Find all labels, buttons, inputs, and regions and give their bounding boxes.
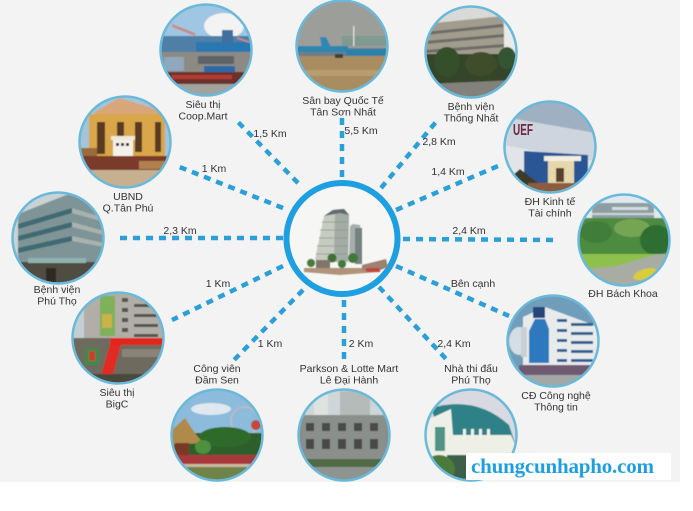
central hub: apartment towers	[286, 183, 398, 294]
distance: 2,3 Km: 2,3 Km	[163, 225, 197, 237]
label: ĐH Kinh tế Tài chính: Tài chính	[528, 208, 572, 220]
photo: Phú Thọ	[12, 192, 104, 284]
label: ĐH Bách Khoa: ĐH Bách Khoa	[588, 288, 658, 300]
station: Parkson & Lotte Mart	[298, 363, 398, 481]
photo: Nhà thi đấu	[423, 389, 517, 483]
connector: Bách Khoa	[403, 239, 557, 240]
photo: Đầm Sen	[171, 389, 263, 481]
label: Siêu thị BigC: BigC	[106, 398, 129, 410]
label: UBND Q.Tân Phú: UBND	[113, 191, 143, 203]
label: Parkson & Lotte Mart Lê Đại Hành: Parkson & Lotte Mart	[300, 363, 398, 375]
connector: Thống Nhất	[381, 122, 436, 188]
station: ĐH Bách Khoa	[578, 194, 672, 300]
distance: 2,8 Km: 2,8 Km	[422, 136, 456, 148]
connector: UBND	[177, 166, 283, 208]
watermark: chungcunhapho.com: chungcunhapho.com	[471, 454, 654, 478]
label: Nhà thi đấu Phú Thọ: Phú Thọ	[451, 374, 491, 386]
distance: 1,5 Km: 1,5 Km	[253, 128, 287, 140]
connector: UEF	[396, 166, 498, 210]
label: Nhà thi đấu Phú Thọ: Nhà thi đấu	[444, 363, 498, 375]
connector: Parkson	[342, 300, 346, 360]
label: Siêu thị BigC: Siêu thị	[99, 387, 135, 399]
connector: Nhà thi đấu	[379, 287, 447, 360]
station: Sân bay Quốc Tế Tân Sơn Nhất	[296, 0, 388, 118]
label: Bệnh viện Thống Nhất: Bệnh viện	[448, 101, 494, 113]
label: Parkson & Lotte Mart Lê Đại Hành: Lê Đại Hành	[320, 374, 378, 386]
distance: Bên cạnh: Bên cạnh	[451, 278, 495, 290]
photo: Parkson	[298, 389, 390, 481]
label: Siêu thị Coop.Mart: Coop.Mart	[178, 110, 228, 122]
distance: 2 Km: 2 Km	[349, 338, 374, 350]
distance: 2,4 Km Nhà thi đấu: 2,4 Km	[437, 338, 471, 350]
station: Công viên Đầm Sen	[171, 363, 263, 481]
station: CĐ Công nghệ Thông tin	[507, 295, 599, 414]
photo: Coop.Mart	[160, 4, 252, 96]
connector: Coop.Mart	[238, 122, 298, 183]
label: Bệnh viện Thống Nhất: Thống Nhất	[444, 112, 499, 124]
station: Siêu thị BigC	[72, 292, 164, 410]
distance: 1 Km BigC: 1 Km	[206, 278, 231, 290]
label: ĐH Kinh tế Tài chính: ĐH Kinh tế	[525, 196, 575, 208]
label: Công viên Đầm Sen: Đầm Sen	[195, 374, 239, 386]
sign text: UEF: UEF	[513, 122, 533, 139]
distance: 5,5 Km: 5,5 Km	[344, 125, 378, 137]
label: Sân bay Quốc Tế: Sân bay Quốc Tế	[302, 95, 384, 107]
label: Công viên Đầm Sen: Công viên	[193, 363, 241, 375]
connector: Đầm Sen	[234, 290, 303, 360]
photo: Bách Khoa	[578, 194, 672, 286]
photo: UBND	[79, 96, 171, 188]
connector: sân bay	[340, 117, 344, 177]
label: CĐ Công nghệ Thông tin: Thông tin	[534, 402, 578, 414]
distance: 2,4 Km Bách Khoa: 2,4 Km	[452, 225, 486, 237]
label: Bệnh viện Phú Thọ: Bệnh viện	[34, 284, 80, 296]
photo: sân bay	[296, 0, 388, 92]
station: Bệnh viện Thống Nhất	[425, 6, 517, 124]
station: UBND Q.Tân Phú	[79, 96, 171, 214]
station: Siêu thị Coop.Mart	[160, 4, 252, 122]
label: Sân bay Quốc Tế: Tân Sơn Nhất	[310, 106, 376, 118]
distance: 1 Km Đầm Sen: 1 Km	[258, 338, 283, 350]
photo: CĐ Công nghệ	[507, 295, 599, 387]
connector: Bệnh viện Phú Thọ	[117, 236, 283, 240]
label: Siêu thị Coop.Mart: Siêu thị	[185, 99, 221, 111]
distance: 1,4 Km: 1,4 Km	[431, 166, 465, 178]
station: Bệnh viện Phú Thọ	[12, 192, 104, 308]
station: ĐH Kinh tế Tài chính	[504, 101, 596, 220]
station: Nhà thi đấu Phú Thọ	[423, 363, 517, 483]
photo: Thống Nhất	[425, 6, 517, 98]
label: UBND Q.Tân Phú: Q.Tân Phú	[103, 202, 154, 214]
connector: BigC	[172, 266, 283, 320]
connector: CĐ Công nghệ	[396, 266, 509, 316]
distance: 1 Km UBND: 1 Km	[202, 163, 227, 175]
label: CĐ Công nghệ Thông tin: CĐ Công nghệ	[521, 390, 591, 402]
label: Bệnh viện Phú Thọ: Phú Thọ	[37, 296, 77, 308]
photo: BigC	[72, 292, 164, 384]
